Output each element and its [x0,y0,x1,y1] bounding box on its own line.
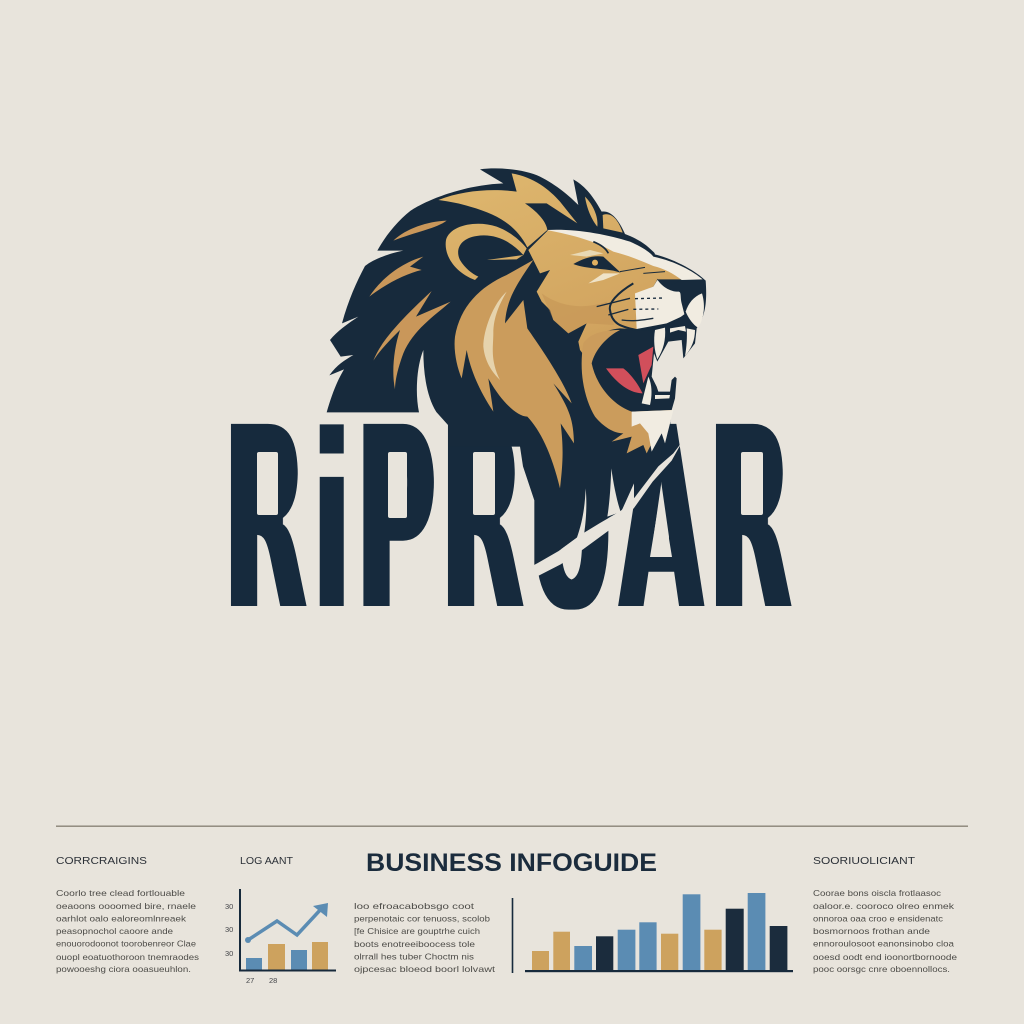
text block: right: pooc oorsgc cnre oboennollocs. [813,964,950,974]
lion silhouette [327,168,706,565]
left mane tufts [369,221,451,389]
chart: bar chart [525,893,793,972]
axis labels [225,902,277,985]
central mane [455,260,574,488]
cheek shading [542,293,614,333]
text block: middle: ojpcesac bloeod boorl lolvawt [354,964,496,974]
mane highlights [483,292,507,380]
text block: middle: olrrall hes tuber Choctm nis [354,952,474,962]
wordmark: U [528,370,615,670]
upper fangs [654,326,695,359]
text block: right: ooesd oodt end ioonortbornoode [813,952,957,962]
bottom divider [56,826,968,827]
text block: right: Coorae bons oiscla frotlaasoc [813,888,941,898]
crest spike [585,197,597,227]
bars [246,942,328,970]
vertical divider [512,898,513,973]
face [528,230,682,357]
ear [446,224,527,280]
text block: left: oeaoons oooomed bire, rnaele [56,901,196,911]
text block: middle: perpenotaic cor tenuoss, scolob [354,914,490,924]
mane slivers [577,468,634,538]
wordmark [224,370,792,670]
heading: log aant: LOG AANT [240,856,293,867]
text block: right: ennoroulosoot eanonsinobo cloa [813,938,954,948]
wordmark: R [224,370,307,670]
muzzle [635,280,685,329]
wordmark: A [620,370,703,670]
text block: middle [354,901,496,974]
lower swoosh [534,442,682,577]
wordmark: P [357,370,435,670]
heading: right column: SOORIUOLICIANT [813,856,915,867]
wordmark: R [441,370,524,670]
crest bump [603,214,623,233]
trend arrow [245,903,328,943]
snout front [686,293,704,328]
chart: small combo chart [225,889,336,985]
title: BUSINESS INFOGUIDE [366,849,657,877]
eye [570,250,665,283]
heading: corporations: CORRCRAIGINS [56,856,147,867]
nose [657,278,706,317]
top mane gold [438,173,577,247]
lower teeth [642,377,670,405]
axis labels: 28 [269,976,277,985]
text block: left: peasopnochol caoore ande [56,926,173,936]
cheek and chin fur [582,330,672,453]
axis labels: 30 [225,902,233,911]
text block: middle: [fe Chisice are gouptrhe cuich [354,926,480,936]
lion head logo [327,168,706,577]
text block: right [813,888,957,974]
text block: left: oarhlot oalo ealoreomlnreaek [56,914,187,924]
chin white fur [632,410,673,452]
text block: left: Coorlo tree clead fortlouable [56,888,185,898]
text block: left [56,888,199,974]
text block: middle: loo efroacabobsgo coot [354,901,475,911]
text block: left: enouorodoonot toorobenreor Clae [56,938,196,948]
forehead highlight [547,230,703,280]
text block: middle: boots enotreeiboocess tole [354,939,475,949]
text block: right: bosmornoos frothan ande [813,926,930,936]
wordmark: R [709,370,792,670]
tongue [606,347,653,393]
text block: right: oaloor.e. cooroco olreo enmek [813,901,955,911]
axis labels: 30 [225,925,233,934]
axis labels: 30 [225,949,233,958]
wordmark: i [314,379,349,668]
axes [240,889,336,970]
whisker area [597,283,685,330]
brow line [593,237,654,254]
text block: left: powooeshg ciora ooasueuhlon. [56,964,191,974]
axis labels: 27 [246,976,254,985]
text block: right: onnoroa oaa croo e ensidenatc [813,914,943,924]
text block: left: ouopl eoatuothoroon tnemraodes [56,952,199,962]
